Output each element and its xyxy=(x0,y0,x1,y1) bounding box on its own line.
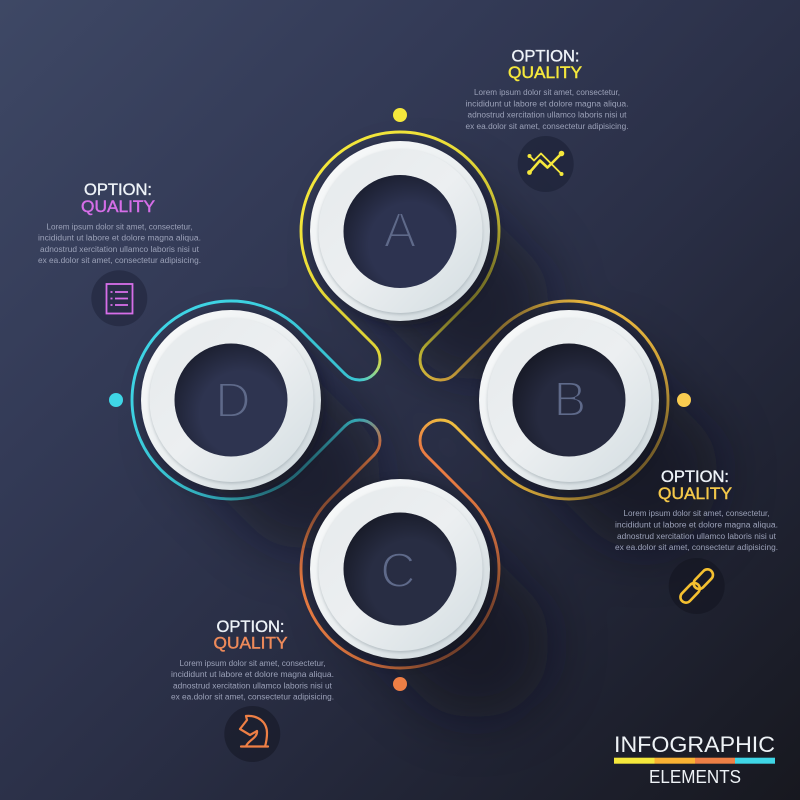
text block: option C: QUALITY xyxy=(214,634,288,652)
icon: document list xyxy=(91,270,147,326)
text block: option B: ex ea.dolor sit amet, consectetur adipisicing. xyxy=(615,543,778,552)
text block: option C: Lorem ipsum dolor sit amet, consectetur, xyxy=(180,659,326,668)
letter C: C xyxy=(380,544,416,598)
text block: option A: ex ea.dolor sit amet, consectetur adipisicing. xyxy=(466,122,628,131)
text block: option B xyxy=(615,468,778,552)
text block: option C: ex ea.dolor sit amet, consectetur adipisicing. xyxy=(171,692,334,702)
hook: yellow to amber xyxy=(420,345,455,380)
line: option A yellow xyxy=(301,132,499,345)
end dot: D xyxy=(109,393,123,407)
text block: option A xyxy=(466,48,628,131)
text block: option B: Lorem ipsum dolor sit amet, consectetur, xyxy=(624,509,770,518)
icon: line chart xyxy=(518,136,574,192)
text block: option A: incididunt ut labore et dolore magna aliqua. xyxy=(466,100,628,108)
text block: option B: OPTION: xyxy=(661,468,729,486)
text block: option D: adnostrud xercitation ullamco laboris nisi ut xyxy=(40,245,200,254)
ring A xyxy=(310,141,490,321)
end dot: B xyxy=(677,393,691,407)
hook: amber to orange xyxy=(420,420,455,455)
text block: option C: incididunt ut labore et dolore magna aliqua. xyxy=(171,670,334,679)
hook: teal to yellow xyxy=(345,345,380,380)
text block: option D xyxy=(38,181,201,265)
letter D: D xyxy=(215,374,251,428)
logo: infographic elements xyxy=(614,732,775,787)
line: option C orange xyxy=(301,455,499,668)
letter B: B xyxy=(554,373,586,427)
ring C xyxy=(310,479,490,659)
icon: chain link xyxy=(669,558,725,614)
end dot: A xyxy=(393,108,407,122)
logo: infographic elements: INFOGRAPHIC xyxy=(614,732,775,757)
text block: option A: OPTION: xyxy=(512,48,580,66)
ring D xyxy=(141,310,321,490)
text block: option D: QUALITY xyxy=(81,197,155,216)
text block: option B: incididunt ut labore et dolore magna aliqua. xyxy=(615,520,778,530)
contact shadows xyxy=(144,145,662,663)
text block: option D: OPTION: xyxy=(84,181,152,199)
line: option B amber xyxy=(455,301,668,499)
text block: option D: ex ea.dolor sit amet, consectetur adipisicing. xyxy=(38,256,201,265)
end dot: C xyxy=(393,677,407,691)
text block: option C: adnostrud xercitation ullamco laboris nisi ut xyxy=(173,682,333,690)
text block: option B: adnostrud xercitation ullamco laboris nisi ut xyxy=(617,532,777,541)
logo: infographic elements: ELEMENTS xyxy=(649,766,741,787)
cast shadows xyxy=(251,251,644,644)
icon: chess knight xyxy=(224,706,280,762)
text block: option C: OPTION: xyxy=(216,618,284,636)
letter A: A xyxy=(384,204,417,258)
text block: option A: Lorem ipsum dolor sit amet, consectetur, xyxy=(474,88,620,97)
text block: option D: incididunt ut labore et dolore magna aliqua. xyxy=(38,234,201,242)
hook: orange to teal xyxy=(345,420,380,455)
line: option D teal xyxy=(132,301,345,499)
connector lines xyxy=(132,132,668,668)
text block: option C xyxy=(171,618,334,702)
text block: option D: Lorem ipsum dolor sit amet, consectetur, xyxy=(46,222,192,232)
ring B xyxy=(479,310,659,490)
text block: option B: QUALITY xyxy=(658,484,732,503)
text block: option A: QUALITY xyxy=(508,63,582,82)
text block: option A: adnostrud xercitation ullamco laboris nisi ut xyxy=(468,110,627,120)
